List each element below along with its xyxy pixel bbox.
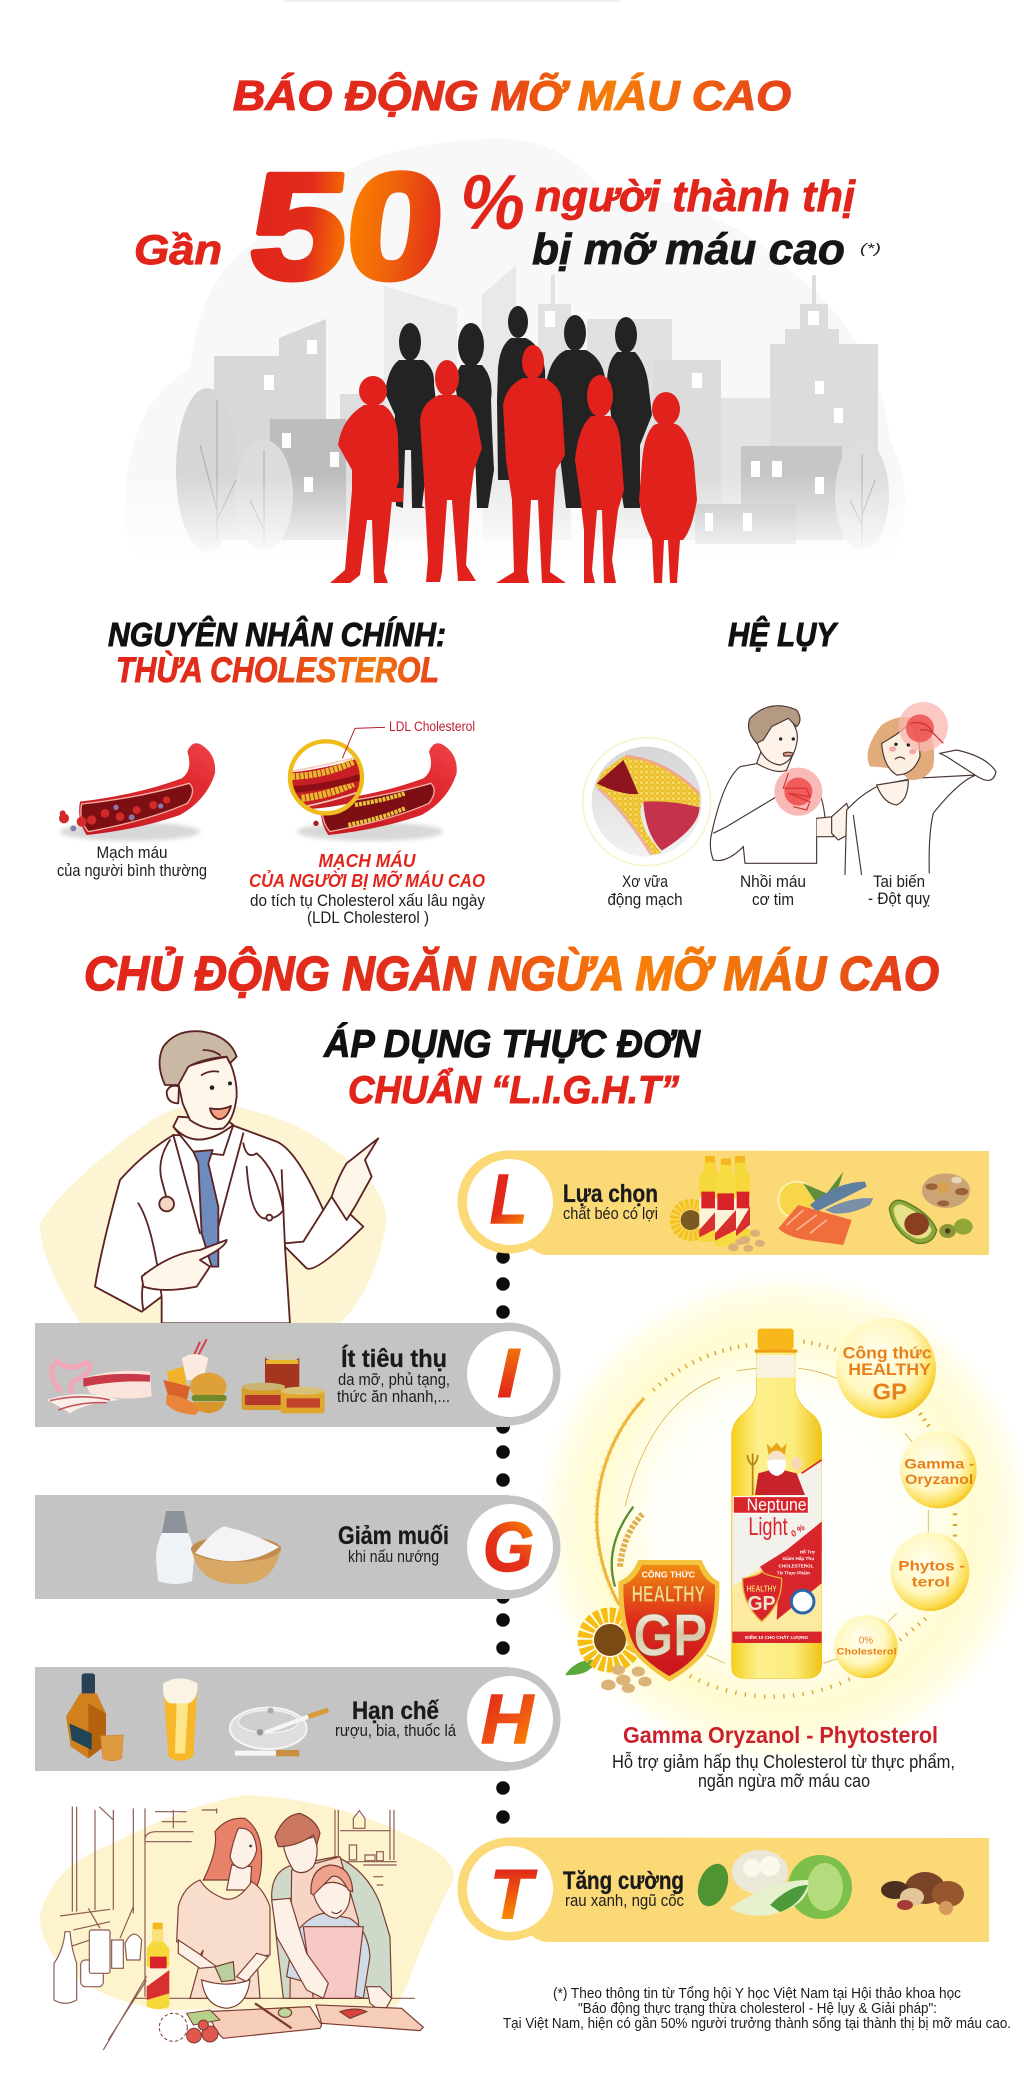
label: LDL Cholesterol: LDL Cholesterol <box>389 718 475 734</box>
bottle: Hỗ Trợ <box>800 1548 816 1554</box>
text: Giảm muối: Giảm muối <box>338 1522 449 1550</box>
text: Gamma Oryzanol benefit: ngăn ngừa mỡ máu cao <box>698 1771 870 1791</box>
right hand pointing <box>332 1138 378 1220</box>
salad bowl <box>202 1962 250 2008</box>
panel: T row <box>458 1838 989 1942</box>
shield: Healthy GP <box>618 1560 719 1682</box>
small oil bottle <box>147 1923 169 2009</box>
caption: three consequences: cơ tim <box>752 891 794 909</box>
icon: whisky bottle <box>66 1673 123 1761</box>
text: Lựa chọn: Lựa chọn <box>563 1180 658 1208</box>
bottle: Neptune <box>747 1495 807 1515</box>
icon: avocado olives nuts <box>889 1173 973 1243</box>
bottle: 0 % <box>789 1522 807 1539</box>
panel: I row: da mỡ, phủ tạng, <box>338 1371 450 1389</box>
bubble: 0% Cholesterol <box>834 1615 898 1678</box>
connector dots <box>496 1250 510 1824</box>
bottle: GP <box>747 1592 776 1615</box>
icon: nuts and grains <box>881 1872 964 1915</box>
bubble: Phytosterol <box>891 1532 969 1611</box>
bubble: Công thức Healthy GP: Công thức <box>843 1343 932 1362</box>
text: Nguyên nhân chính: NGUYÊN NHÂN CHÍNH: <box>108 616 446 653</box>
shirt collar <box>173 1125 233 1155</box>
panel: H row: rượu, bia, thuốc lá <box>335 1722 457 1740</box>
bottle: Giảm Hấp Thụ <box>783 1555 814 1561</box>
panel: L row: chất béo có lợi <box>563 1205 658 1223</box>
bubble: Gamma Oryzanol <box>900 1432 977 1508</box>
circle bead <box>313 821 319 826</box>
tomatoes and cauliflower <box>159 2010 220 2043</box>
panel: L row <box>458 1150 989 1255</box>
red silhouettes <box>330 345 697 583</box>
text: Gamma Oryzanol benefit: Gamma Oryzanol - Phytosterol <box>623 1722 938 1748</box>
yellow blob <box>40 1103 387 1323</box>
text: Tăng cường: Tăng cường <box>563 1867 684 1895</box>
icon: vegetables <box>692 1850 852 1919</box>
caption: three consequences <box>608 873 931 909</box>
dark silhouettes <box>385 306 652 508</box>
caption: normal vessel: Mạch máu <box>96 843 168 862</box>
sub heading: LIGHT menu <box>323 1022 701 1112</box>
bubble: Công thức Healthy GP: HEALTHY <box>848 1360 931 1379</box>
shield: Healthy GP: CÔNG THỨC <box>642 1570 695 1579</box>
text: Thừa cholesterol: THỪA CHOLESTEROL <box>116 650 439 690</box>
illustration: city skyline background <box>110 139 920 565</box>
title: BÁO ĐỘNG MỠ MÁU CAO <box>233 71 791 119</box>
coat <box>95 1125 363 1323</box>
Neptune plate <box>733 1497 808 1513</box>
man <box>272 1813 392 1998</box>
illustration: family cooking <box>40 1795 454 2050</box>
bubble: Gamma Oryzanol: Gamma - <box>904 1455 975 1471</box>
sunflower <box>565 1615 635 1675</box>
footnote mark: (*) <box>860 240 881 256</box>
icon: ashtray and cigarettes <box>230 1708 328 1756</box>
illustration: Neptune Light bottle with formula bubbles <box>565 1318 977 1697</box>
heading: consequences: HỆ LỤY <box>728 616 839 653</box>
yellow blob <box>40 1795 454 2010</box>
illustration: atherosclerosis circle <box>583 738 711 866</box>
bubble: Phytosterol: terol <box>912 1574 950 1590</box>
panel: H row <box>35 1667 560 1771</box>
sub heading: LIGHT menu: ÁP DỤNG THỰC ĐƠN <box>323 1022 701 1066</box>
text: người thành thị: người thành thị <box>535 172 856 221</box>
text: Gamma Oryzanol benefit <box>612 1722 955 1791</box>
callout line: LDL <box>342 727 385 758</box>
caption: three consequences: - Đột quỵ <box>868 890 931 908</box>
big number 50: 50 <box>243 142 452 310</box>
footnote: "Báo động thực trạng thừa cholesterol - Hệ lụy & Giải pháp": <box>578 2001 937 2017</box>
panel: bottle glow background <box>525 1262 1024 1778</box>
percent sign: % <box>460 158 525 246</box>
bottle <box>732 1329 822 1678</box>
left hand pointing <box>142 1240 227 1290</box>
bottle: CHOLESTEROL <box>778 1563 814 1568</box>
letter I: I <box>497 1334 521 1412</box>
illustration: crowd silhouettes <box>330 306 697 583</box>
text: bị mỡ máu cao: bị mỡ máu cao <box>532 225 845 274</box>
caption: three consequences: Nhồi máu <box>740 873 806 891</box>
caption: three consequences: Xơ vữa <box>622 873 669 891</box>
kitchen lines <box>54 1807 415 2050</box>
panel: T row: rau xanh, ngũ cốc <box>565 1892 684 1910</box>
king <box>755 1468 805 1495</box>
illustration: doctor <box>40 1031 387 1323</box>
icon: beer glass <box>163 1678 197 1761</box>
section heading: prevention: CHỦ ĐỘNG NGĂN NGỪA MỠ MÁU CAO <box>84 946 939 1001</box>
caption: three consequences: động mạch <box>608 891 682 909</box>
sub heading: LIGHT menu: CHUẨN “L.I.G.H.T” <box>348 1067 679 1112</box>
girl <box>287 1865 370 1998</box>
bubble: Công thức Healthy GP: GP <box>873 1378 907 1404</box>
wheat <box>612 1507 643 1587</box>
bubble: Phytosterol: Phytos - <box>898 1558 965 1574</box>
heading: main cause <box>108 616 446 690</box>
caption: high cholesterol vessel: CỦA NGƯỜI BỊ MỠ MÁU CAO <box>249 870 485 891</box>
caption: high cholesterol vessel: MẠCH MÁU <box>318 850 416 871</box>
bubble: 0% Cholesterol: Cholesterol <box>837 1647 897 1657</box>
tie <box>193 1150 218 1267</box>
icon: canned food <box>242 1353 325 1413</box>
icon: fast food <box>163 1339 227 1415</box>
caption: three consequences: Tai biến <box>873 873 925 891</box>
caption: high cholesterol vessel: do tích tụ Cholesterol xấu lâu ngày <box>250 892 486 910</box>
letter L: L <box>490 1160 527 1238</box>
headline: 50 percent <box>134 142 881 310</box>
arms and hands <box>178 1898 392 2013</box>
bubble: Gamma Oryzanol: Oryzanol <box>905 1471 973 1487</box>
soybeans <box>601 1665 652 1693</box>
neck and face <box>173 1117 233 1140</box>
woman <box>177 1818 270 1998</box>
stethoscope <box>160 1140 283 1219</box>
top edge strip <box>284 0 620 2</box>
bottle: HEALTHY <box>747 1585 777 1594</box>
footnote: (*) Theo thông tin từ Tổng hội Y học Việt Nam tại Hội thảo khoa học <box>553 1986 961 2002</box>
bubble: Công thức Healthy GP <box>836 1318 936 1418</box>
bottle: Từ Thực Phẩm <box>777 1569 810 1575</box>
panel: G row <box>35 1495 560 1599</box>
dotted orbit <box>596 1342 955 1697</box>
icon: salt shaker <box>156 1511 194 1584</box>
caption: normal vessel: của người bình thường <box>57 861 207 880</box>
cutting boards <box>207 2003 423 2038</box>
footnote <box>503 1986 1011 2032</box>
text: Hạn chế: Hạn chế <box>352 1697 439 1725</box>
shield: Healthy GP: GP <box>633 1601 707 1668</box>
illustration: man with heart attack <box>710 706 851 863</box>
bottle: ĐIỂM 10 CHO CHẤT LƯỢNG <box>745 1634 808 1640</box>
bottle label <box>732 1460 822 1593</box>
illustration: woman with stroke <box>845 702 996 875</box>
icon: fatty meat <box>47 1360 152 1413</box>
letter G: G <box>483 1508 534 1586</box>
letter H: H <box>481 1680 534 1758</box>
letter T: T <box>490 1855 537 1933</box>
bubble: 0% Cholesterol: 0% <box>859 1635 873 1646</box>
illustration: vessel with LDL plaque <box>283 727 457 841</box>
text: Gamma Oryzanol benefit: Hỗ trợ giảm hấp thụ Cholesterol từ thực phẩm, <box>612 1751 955 1772</box>
caption: normal vessel <box>57 843 207 880</box>
text: Gần: Gần <box>134 226 222 273</box>
hair <box>160 1031 237 1085</box>
panel: I row <box>35 1322 560 1427</box>
shield: Healthy GP: HEALTHY <box>632 1582 705 1607</box>
mouth <box>210 1106 231 1119</box>
caption: high cholesterol vessel: (LDL Cholesterol ) <box>307 909 429 927</box>
panel: I row: thức ăn nhanh,... <box>337 1388 450 1406</box>
icon: salmon fish lemon <box>778 1172 873 1245</box>
icon: salt bowl <box>191 1526 281 1584</box>
panel: G row: khi nấu nướng <box>348 1548 439 1566</box>
illustration: normal blood vessel <box>59 743 215 841</box>
icon: sunflower oil bottles <box>675 1156 765 1252</box>
text: Ít tiêu thụ: Ít tiêu thụ <box>341 1344 447 1373</box>
bottle: Light <box>748 1514 788 1541</box>
caption: high cholesterol vessel <box>249 850 486 927</box>
